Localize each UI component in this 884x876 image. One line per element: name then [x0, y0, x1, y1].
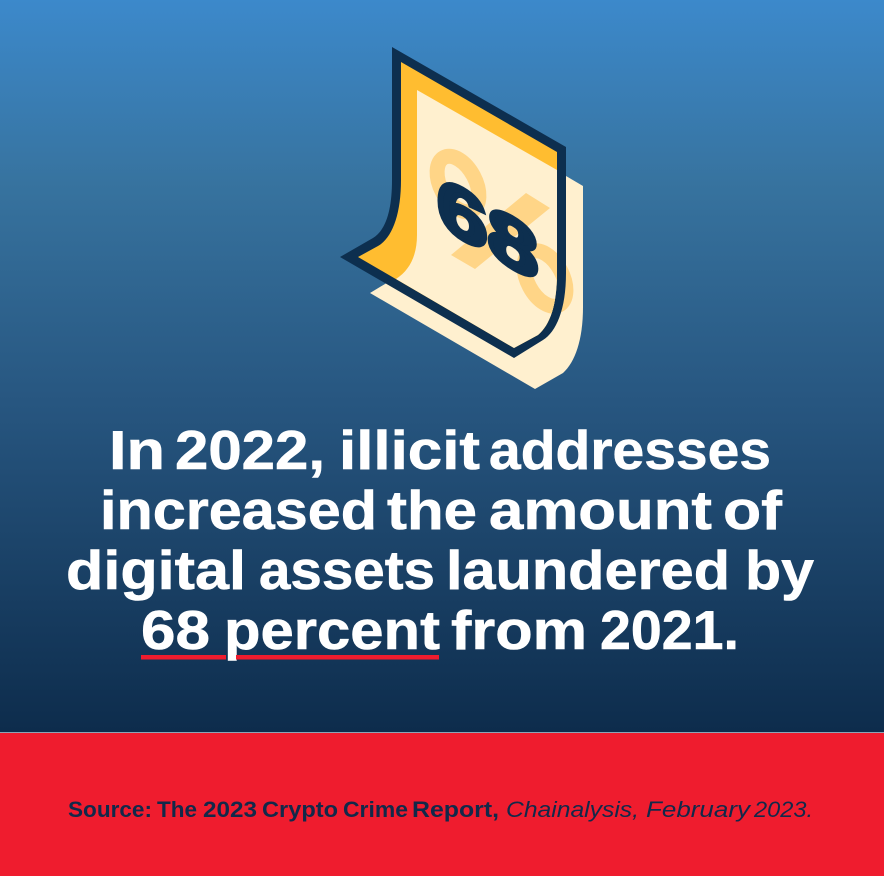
headline text: the: [387, 479, 477, 541]
headline text: 2021.: [600, 599, 739, 661]
headline text: In: [109, 419, 165, 481]
source citation: February: [646, 797, 752, 822]
source citation: Crypto: [262, 797, 338, 822]
source citation: Report,: [412, 797, 499, 822]
headline text: by: [745, 539, 814, 601]
source citation: Chainalysis,: [506, 797, 639, 822]
headline text: increased: [100, 479, 377, 541]
icon: isometric calendar page showing 68 percent: [340, 47, 583, 389]
headline text: 2022,: [175, 419, 325, 481]
source citation: 2023: [203, 797, 257, 822]
headline text: assets: [259, 539, 435, 601]
headline text: laundered: [446, 539, 730, 601]
headline text: illicit: [339, 419, 480, 481]
red underline under 68 percent: [141, 655, 439, 660]
source citation: The: [157, 797, 197, 822]
headline text: amount: [489, 479, 712, 541]
headline text: of: [723, 479, 783, 541]
footer divider: [0, 732, 884, 733]
source citation: Source:: [68, 797, 152, 822]
headline text: percent: [224, 599, 440, 661]
footer band: [0, 732, 884, 876]
headline text: [66, 419, 814, 661]
number on calendar page: 68: [437, 160, 538, 299]
headline text: 68: [141, 599, 210, 661]
headline text: from: [451, 599, 587, 661]
headline text: addresses: [489, 419, 771, 481]
icon: percent sign watermark: [430, 148, 557, 314]
source citation: 2023.: [753, 797, 813, 822]
headline text: digital: [66, 539, 246, 601]
source citation: [68, 797, 813, 822]
source citation: Crime: [343, 797, 408, 822]
